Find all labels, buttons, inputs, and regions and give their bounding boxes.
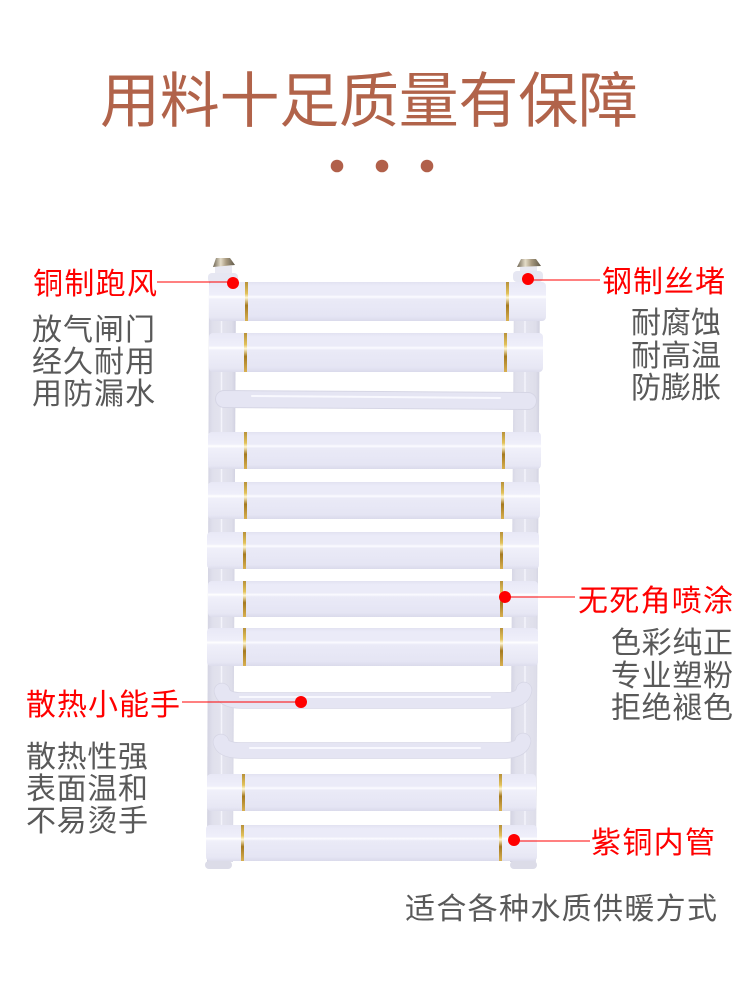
callout: heat dissipation — [26, 689, 307, 722]
right top valve — [513, 259, 543, 282]
text: air vent benefits: 放气闸门 — [32, 314, 155, 347]
callout: copper inner tube: 紫铜内管 — [591, 827, 715, 860]
bottom feet — [205, 861, 537, 869]
text: air vent benefits — [32, 314, 155, 411]
bar 3 — [208, 432, 541, 469]
towel bar 2 — [222, 690, 524, 700]
left vertical column — [207, 282, 236, 862]
text: plug benefits: 耐高温 — [631, 340, 721, 373]
bar 1 — [209, 282, 546, 321]
callout: heat dissipation: 散热小能手 — [26, 689, 180, 722]
callout: copper air vent — [33, 268, 239, 301]
right vertical column — [510, 282, 540, 862]
text: plug benefits — [631, 307, 721, 405]
text: heat benefits — [26, 741, 148, 838]
bar 5 — [207, 532, 539, 569]
text: heat benefits: 散热性强 — [26, 741, 148, 774]
towel bar 1 — [224, 396, 528, 401]
bar 7 — [207, 628, 538, 666]
title: 用料十足质量有保障 — [100, 68, 638, 135]
bar 4 — [208, 482, 540, 519]
text: plug benefits: 耐腐蚀 — [631, 307, 721, 340]
footer note: 适合各种水质供暖方式 — [405, 893, 717, 926]
callout: copper air vent: 铜制跑风 — [33, 268, 157, 301]
text: spray benefits: 色彩纯正 — [611, 627, 733, 660]
text: heat benefits: 表面温和 — [26, 773, 148, 806]
text: plug benefits: 防膨胀 — [631, 372, 721, 405]
callout: copper inner tube — [508, 827, 715, 860]
text: heat benefits: 不易烫手 — [26, 805, 148, 838]
decorative dots under title — [331, 160, 433, 172]
callout: full-coverage spray — [499, 585, 733, 618]
bar 2 — [209, 333, 543, 372]
bar 9 — [206, 825, 537, 861]
callout: full-coverage spray: 无死角喷涂 — [578, 585, 733, 618]
text: spray benefits — [611, 627, 733, 725]
towel bar 3 — [221, 741, 523, 750]
callout: steel plug: 钢制丝堵 — [602, 266, 725, 299]
text: spray benefits: 专业塑粉 — [611, 660, 733, 693]
radiator illustration — [205, 258, 546, 869]
text: spray benefits: 拒绝褪色 — [611, 692, 733, 725]
text: air vent benefits: 用防漏水 — [32, 378, 155, 411]
left top valve — [208, 258, 238, 283]
text: air vent benefits: 经久耐用 — [32, 346, 155, 379]
callout: steel plug — [522, 266, 725, 299]
bar 8 — [207, 774, 536, 811]
bar 6 — [208, 581, 538, 617]
